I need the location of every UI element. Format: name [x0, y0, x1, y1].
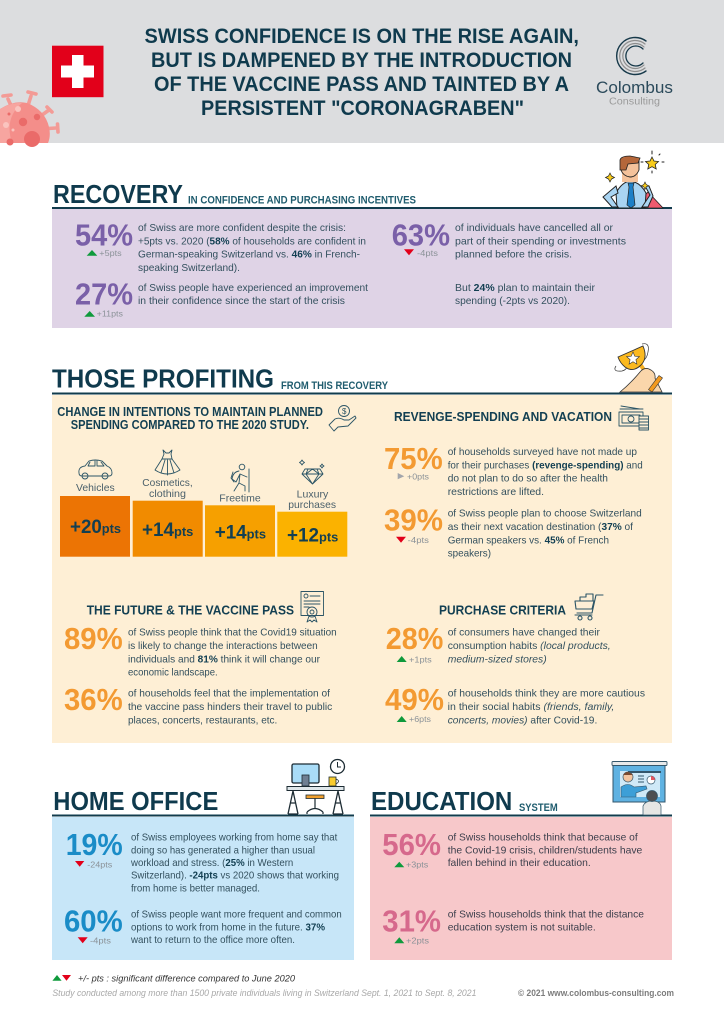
bar: luxury purchases: [277, 488, 347, 557]
stat: 60%: want to return to the office more often.: [130, 934, 295, 946]
subheading: revenge-spending and vacation: REVENGE-SPENDING AND VACATION: [394, 409, 612, 424]
icon: hiker: [231, 464, 249, 492]
stat: 89%: 89%: [64, 621, 123, 656]
panel: education: [370, 762, 672, 960]
stat: 27%: [75, 276, 368, 319]
icon: online class screen: [612, 762, 667, 815]
header band: [0, 0, 724, 147]
stat: 31%: of Swiss households think that the distance: [448, 909, 644, 921]
subheading: the future and the vaccine pass: THE FUTURE & THE VACCINE PASS: [87, 602, 294, 617]
stat: 39%: speakers): [448, 548, 491, 560]
stat: 36%: 36%: [64, 682, 123, 717]
stat: 89%: individuals and 81% think it will change our: [128, 653, 320, 665]
icon: vaccine certificate: [301, 592, 324, 622]
bar: vehicles: +20pts: [70, 517, 121, 538]
stat: 19%: 19%: [66, 827, 123, 862]
stat: 56%: of Swiss households think that because of: [448, 832, 638, 844]
icon: desk with computer and clock: [287, 760, 344, 814]
stat: 39%: of Swiss people plan to choose Switzerland: [448, 508, 642, 520]
subheading: change in intentions: [57, 404, 323, 432]
title: BUT IS DAMPENED BY THE INTRODUCTION: [151, 49, 572, 72]
logo: Colombus Consulting: Consulting: [609, 96, 660, 108]
stat: 28%: consumption habits (local products,: [448, 640, 611, 652]
icon: banknotes and coins: [619, 406, 648, 430]
stat: 56%: 56%: [382, 827, 441, 862]
logo: Colombus Consulting: [596, 38, 673, 108]
stat: 39%: -4pts: [408, 535, 429, 545]
bar: cosmetics, clothing: +14pts: [142, 520, 193, 541]
subheading: change in intentions: CHANGE IN INTENTIONS TO MAINTAIN PLANNED: [57, 404, 323, 419]
stat: 63%: of individuals have cancelled all or: [455, 222, 613, 234]
stat: 56%: fallen behind in their education.: [448, 857, 591, 869]
text: 24% maintain spending: But 24% plan to maintain their: [455, 282, 595, 294]
heading: home office: HOME OFFICE: [53, 786, 218, 816]
stat: 39%: as their next vacation destination (37% of: [448, 521, 633, 533]
stat: 28%: 28%: [386, 621, 443, 656]
icon: diamond: [300, 460, 324, 484]
stat: 56%: +3pts: [406, 860, 428, 870]
stat: 89%: of Swiss people think that the Covid19 situation: [128, 627, 337, 639]
stat: 56%: [382, 827, 642, 870]
heading: recovery: RECOVERY: [53, 179, 183, 209]
bar: freetime: [205, 493, 275, 557]
stat: 49%: 49%: [385, 682, 444, 717]
stat: 60%: options to work from home in the future. 37%: [131, 921, 326, 933]
icon: Swiss flag: [52, 46, 104, 97]
heading: education system: EDUCATION: [371, 786, 512, 816]
icon: hand with coin: [329, 406, 356, 431]
stat: 75%: restrictions are lifted.: [448, 486, 544, 498]
stat: 60%: [64, 904, 342, 946]
stat: 54%: 54%: [75, 218, 133, 252]
stat: 39%: 39%: [384, 503, 443, 538]
stat: 63%: planned before the crisis.: [455, 249, 572, 261]
bar: luxury purchases: +12pts: [287, 526, 338, 547]
stat: 54%: of Swiss are more confident despite the crisis:: [138, 222, 346, 234]
stat: 36%: [64, 682, 332, 726]
icon: shopping cart: [575, 594, 603, 620]
subheading: change in intentions: SPENDING COMPARED TO THE 2020 STUDY.: [71, 417, 309, 432]
stat: 89%: [64, 621, 337, 679]
stat: 75%: 75%: [384, 441, 443, 476]
stat: 54%: speaking Switzerland).: [138, 262, 240, 274]
stat: 28%: medium-sized stores): [448, 653, 547, 665]
heading: education system: SYSTEM: [519, 802, 558, 814]
footer: copyright: © 2021 www.colombus-consulting.com: [518, 988, 674, 998]
stat: 63%: -4pts: [417, 248, 438, 258]
icon: proud businessman: [603, 151, 664, 208]
icon: trophy in hand: [615, 344, 662, 392]
stat: 49%: concerts, movies) after Covid-19.: [448, 714, 597, 726]
stat: 19%: from home is better managed.: [131, 882, 260, 894]
stat: 27%: of Swiss people have experienced an improvement: [138, 282, 368, 294]
stat: 75%: [384, 441, 643, 498]
bar: freetime: Freetime: [219, 493, 261, 505]
heading: those profiting: THOSE PROFITING: [52, 364, 274, 394]
stat: 39%: [384, 503, 642, 560]
stat: 31%: 31%: [382, 904, 441, 939]
icon: dress: [155, 450, 180, 475]
stat: 63%: 63%: [392, 218, 450, 252]
stat: 28%: of consumers have changed their: [448, 627, 600, 639]
icon: car: [79, 460, 112, 479]
stat: 31%: education system is not suitable.: [448, 921, 596, 933]
stat: 49%: of households think they are more cautious: [448, 688, 645, 700]
stat: 75%: +0pts: [407, 471, 429, 481]
stat: 27%: in their confidence since the start of the crisis: [138, 295, 345, 307]
stat: 49%: +6pts: [409, 714, 431, 724]
stat: 31%: [382, 904, 644, 946]
stat: 19%: doing so has generated a higher than usual: [131, 844, 315, 856]
stat: 28%: +1pts: [409, 654, 432, 664]
bar: vehicles: Vehicles: [76, 482, 115, 494]
heading: recovery: IN CONFIDENCE AND PURCHASING INCENTIVES: [188, 194, 416, 206]
stat: 60%: of Swiss people want more frequent and common: [131, 909, 342, 921]
stat: 19%: workload and stress. (25% in Western: [130, 857, 293, 869]
title: OF THE VACCINE PASS AND TAINTED BY A: [154, 73, 569, 96]
panel: home office: [52, 760, 354, 960]
icon: hand with coin: $: [342, 407, 347, 416]
title: [144, 25, 579, 120]
chart: spending intention bars: [60, 477, 347, 557]
stat: 63%: [392, 218, 626, 261]
stat: 19%: -24pts: [87, 860, 112, 870]
stat: 54%: German-speaking Switzerland vs. 46% in French-: [138, 249, 360, 261]
title: SWISS CONFIDENCE IS ON THE RISE AGAIN,: [144, 25, 579, 48]
bar: cosmetics, clothing: [133, 477, 203, 557]
heading: recovery: [53, 179, 416, 209]
stat: 54%: +5pts: [99, 248, 122, 258]
stat: 36%: places, concerts, restaurants, etc.: [128, 714, 277, 726]
stat: 49%: [385, 682, 645, 726]
bar: cosmetics, clothing: clothing: [149, 488, 186, 500]
bar: luxury purchases: Luxury: [297, 488, 329, 500]
stat: 54%: [75, 218, 366, 274]
stat: 75%: for their purchases (revenge-spending) and: [448, 459, 643, 471]
stat: 63%: part of their spending or investments: [455, 236, 626, 248]
footer: study note: Study conducted among more than 1500 private individuals living in Switzerland Sept. 1, 2021 to Sept. 8, 2021: [52, 988, 476, 998]
bar: luxury purchases: purchases: [288, 499, 336, 511]
logo: Colombus Consulting: Colombus: [596, 78, 673, 97]
stat: 89%: is likely to change the interactions between: [128, 640, 318, 652]
bar: cosmetics, clothing: Cosmetics,: [142, 477, 193, 489]
panel: recovery: [52, 151, 672, 328]
bar: vehicles: [60, 482, 130, 557]
stat: 60%: 60%: [64, 904, 123, 939]
stat: 27%: +11pts: [97, 309, 123, 319]
footer: legend: +/- pts : significant difference compared to June 2020: [78, 974, 296, 985]
stat: 36%: the vaccine pass hinders their travel to public: [128, 701, 332, 713]
stat: 49%: in their social habits (friends, family,: [448, 701, 614, 713]
stat: 39%: German speakers vs. 45% of French: [448, 534, 609, 546]
stat: 27%: 27%: [75, 276, 133, 311]
stat: 75%: do not plan to do so after the health: [448, 473, 608, 485]
panel: those profiting: [52, 344, 672, 743]
text: 24% maintain spending: [455, 282, 595, 307]
bar: freetime: +14pts: [215, 522, 266, 543]
stat: 54%: +5pts vs. 2020 (58% of households are confident in: [138, 236, 366, 248]
stat: 28%: [386, 621, 611, 665]
title: PERSISTENT "CORONAGRABEN": [201, 97, 524, 120]
stat: 60%: -4pts: [90, 936, 111, 946]
stat: 75%: of households surveyed have not made up: [448, 446, 637, 458]
subheading: purchase criteria: PURCHASE CRITERIA: [439, 602, 567, 617]
stat: 19%: [66, 827, 339, 894]
stat: 31%: +2pts: [406, 936, 429, 946]
stat: 19%: Switzerland). -24pts vs 2020 shows that working: [131, 870, 339, 882]
heading: those profiting: FROM THIS RECOVERY: [281, 380, 389, 392]
stat: 56%: the Covid-19 crisis, children/students have: [448, 844, 642, 856]
stat: 89%: economic landscape.: [128, 667, 218, 679]
stat: 19%: of Swiss employees working from home say that: [131, 832, 337, 844]
stat: 36%: of households feel that the implementation of: [128, 688, 330, 700]
text: 24% maintain spending: spending (-2pts vs 2020).: [455, 295, 570, 307]
icon: virus: [0, 92, 58, 147]
